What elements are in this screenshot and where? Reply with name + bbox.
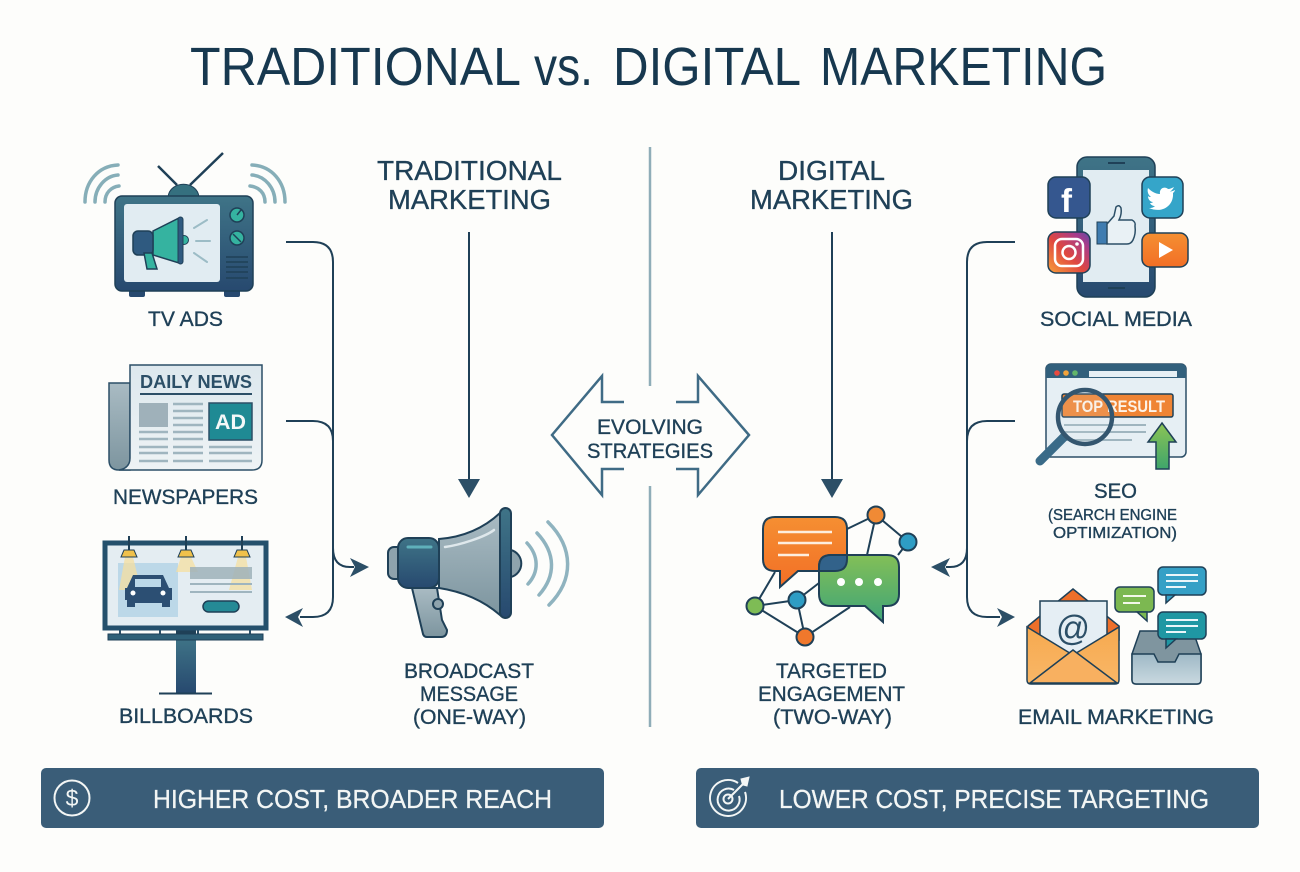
icon: seo browser [1040,364,1186,469]
arrow: digital heading to engagement [821,232,843,498]
label: broadcast message: (ONE-WAY) [413,706,526,729]
label: email marketing: EMAIL MARKETING [1018,706,1214,729]
icon: seo browser: TOP RESULT [1073,397,1166,416]
title: DIGITAL [613,37,801,97]
heading: digital marketing: DIGITAL [778,155,885,186]
icon: newspaper: AD [215,411,246,434]
icon: email marketing [1027,567,1206,684]
label: targeted engagement: TARGETED [776,660,887,683]
label: seo: (SEARCH ENGINE [1048,507,1177,524]
arrow: traditional heading to megaphone [458,232,480,498]
label: evolving strategies: STRATEGIES [587,440,713,463]
icon: newspaper: DAILY NEWS [140,372,252,392]
heading: traditional marketing: TRADITIONAL [377,155,562,186]
title: vs. [534,37,593,97]
connector: digital channels [931,242,1015,627]
label: billboards: BILLBOARDS [119,705,253,728]
icon: newspaper [109,365,262,470]
icon: evolving strategies double arrow [552,376,749,495]
heading: digital marketing: MARKETING [750,184,913,215]
label: seo: SEO [1094,480,1137,503]
label: broadcast message: BROADCAST [404,660,534,683]
title [190,37,1107,97]
banner: higher cost: HIGHER COST, BROADER REACH [153,784,552,814]
icon: dollar [54,780,90,816]
banner: higher cost [41,768,604,828]
label: seo: OPTIMIZATION) [1053,525,1177,542]
banner: lower cost [696,768,1259,828]
icon: email marketing: @ [1056,609,1090,648]
title: TRADITIONAL [190,37,521,97]
label: social media: SOCIAL MEDIA [1040,308,1192,331]
icon: dollar: $ [66,785,79,811]
icon: engagement chat network [746,506,916,646]
label: targeted engagement [758,660,905,729]
label: seo [1048,480,1177,542]
label: broadcast message [404,660,534,729]
label: broadcast message: MESSAGE [420,683,518,706]
icon: social media phone [1048,157,1188,297]
label: tv ads: TV ADS [148,308,223,331]
label: newspapers: NEWSPAPERS [113,486,258,509]
icon: broadcast megaphone [388,508,568,637]
label: targeted engagement: ENGAGEMENT [758,683,905,706]
icon: tv [85,153,285,297]
heading: digital marketing [750,155,913,215]
connector: traditional channels [285,242,369,627]
label: targeted engagement: (TWO-WAY) [773,706,892,729]
icon: billboard [105,536,266,694]
heading: traditional marketing: MARKETING [388,184,551,215]
label: evolving strategies: EVOLVING [597,416,703,439]
icon: target [710,777,749,816]
icon: social media phone: f [1061,182,1073,219]
heading: traditional marketing [377,155,562,215]
title: MARKETING [820,37,1107,97]
banner: lower cost: LOWER COST, PRECISE TARGETING [779,784,1209,814]
label: evolving strategies [587,416,713,463]
